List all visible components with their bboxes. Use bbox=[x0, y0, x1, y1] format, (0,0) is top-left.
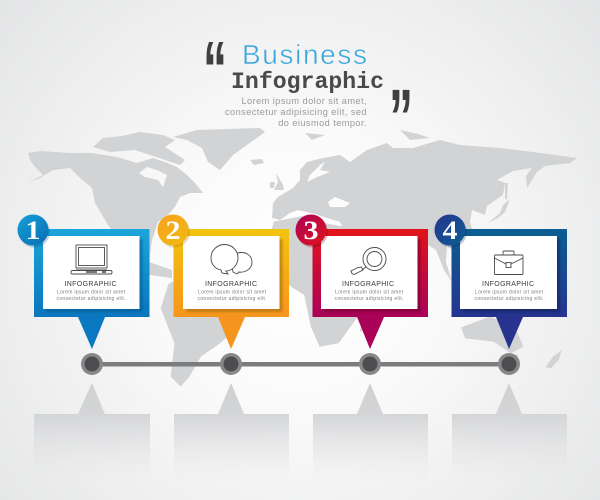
node 3 bbox=[359, 353, 381, 375]
node 4 bbox=[498, 353, 520, 375]
panel 1: laptop bbox=[18, 214, 150, 349]
timeline bbox=[81, 353, 520, 375]
text: Lorem ipsum dolor sit amet bbox=[57, 290, 126, 296]
icon: magnifier bbox=[351, 248, 386, 274]
opening quote mark: “ bbox=[203, 24, 227, 114]
description bbox=[225, 96, 367, 128]
number badge: 1 bbox=[26, 216, 40, 245]
description: Lorem ipsum dolor sit amet, bbox=[241, 96, 367, 106]
heading: Infographic: Infographic bbox=[231, 69, 384, 95]
pointer bbox=[218, 317, 245, 349]
description: consectetur adipisicing elit, sed bbox=[225, 107, 367, 117]
label: INFOGRAPHIC bbox=[342, 281, 394, 288]
text: consectetur adipisicing elit. bbox=[474, 296, 544, 302]
text bbox=[334, 290, 404, 302]
number badge: 3 bbox=[304, 216, 318, 245]
heading: Business: Business bbox=[242, 39, 367, 70]
text: consectetur adipisicing elit. bbox=[334, 296, 404, 302]
text: consectetur adipisicing elit. bbox=[198, 296, 266, 302]
icon: laptop bbox=[71, 245, 112, 274]
panel 2: chat bbox=[158, 214, 289, 349]
number badge: 2 bbox=[166, 216, 180, 245]
title bbox=[203, 24, 413, 162]
pointer bbox=[496, 317, 523, 349]
label: INFOGRAPHIC bbox=[482, 281, 534, 288]
text bbox=[198, 290, 267, 302]
icon: briefcase bbox=[494, 251, 523, 274]
text: Lorem ipsum dolor sit amet bbox=[198, 290, 267, 296]
label: INFOGRAPHIC bbox=[205, 281, 257, 288]
text: Lorem ipsum dolor sit amet bbox=[475, 290, 544, 296]
number badge: 4 bbox=[442, 216, 458, 245]
pointer bbox=[78, 317, 105, 349]
text bbox=[474, 290, 544, 302]
text: Lorem ipsum dolor sit amet bbox=[335, 290, 404, 296]
reflections bbox=[34, 383, 567, 482]
panel 4: briefcase bbox=[434, 214, 567, 349]
node 1 bbox=[81, 353, 103, 375]
pointer bbox=[357, 317, 384, 349]
label: INFOGRAPHIC bbox=[64, 281, 116, 288]
text bbox=[56, 290, 126, 302]
panel 3: search bbox=[296, 214, 428, 349]
node 2 bbox=[220, 353, 242, 375]
text: consectetur adipisicing elit. bbox=[56, 296, 126, 302]
description: do eiusmod tempor. bbox=[278, 118, 367, 128]
icon: speech bubbles bbox=[211, 244, 252, 274]
world map bbox=[27, 128, 577, 387]
closing quote mark: ” bbox=[389, 72, 413, 162]
